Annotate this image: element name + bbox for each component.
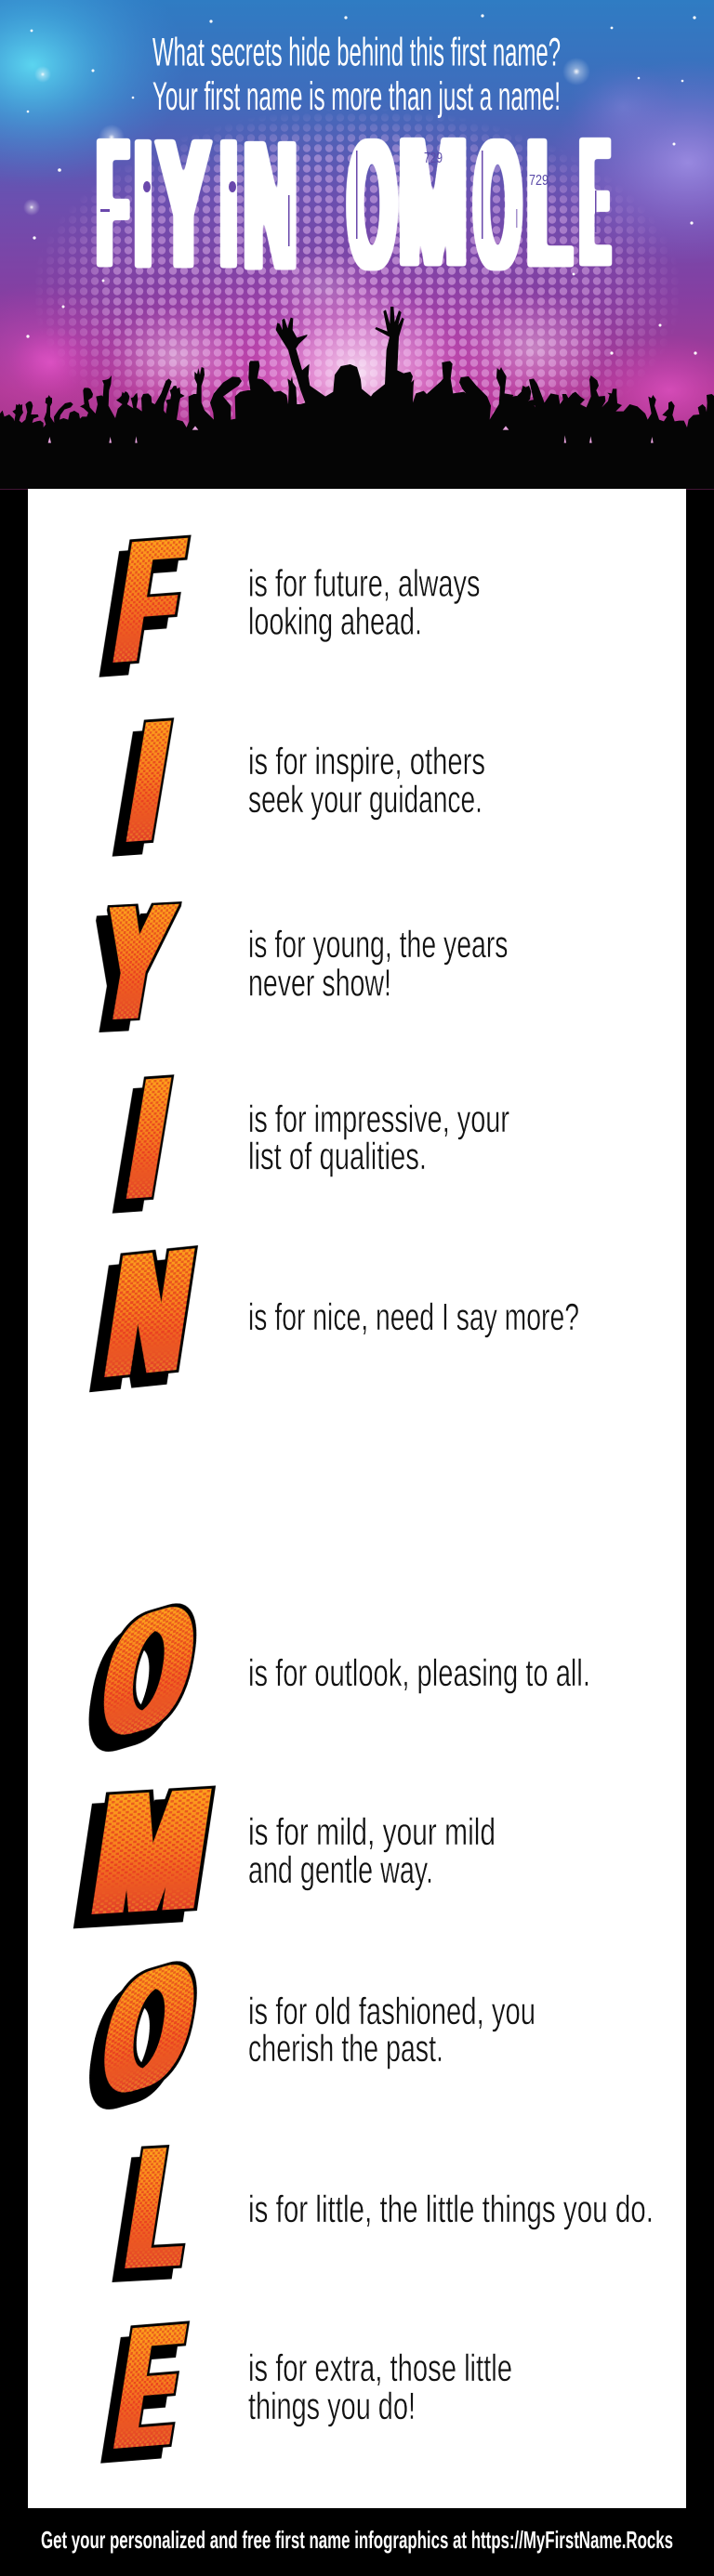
stars and light flares — [23, 14, 697, 355]
crowd silhouette — [0, 307, 714, 490]
row: M: M — [86, 1751, 218, 1952]
row: O — [93, 1563, 590, 1778]
title: name: I — [221, 100, 236, 309]
row: I: I — [120, 1041, 178, 1237]
row: E: is for extra, those little — [248, 2346, 512, 2389]
row: O: cherish the past. — [248, 2027, 443, 2070]
row: F — [107, 500, 481, 700]
title: name: N — [244, 103, 297, 309]
row: N — [99, 1212, 579, 1415]
title: name: 729 — [529, 173, 549, 189]
row: F: is for future, always — [248, 561, 480, 604]
title: name: O — [474, 102, 521, 309]
title: name — [98, 98, 609, 309]
row: N: N — [99, 1212, 201, 1415]
row: O: is for old fashioned, you — [248, 1990, 536, 2032]
row: I — [120, 684, 485, 880]
row: L: L — [119, 2108, 202, 2306]
row: M: and gentle way. — [248, 1848, 433, 1891]
row: M: is for mild, your mild — [248, 1810, 496, 1853]
title: name: 729 — [424, 151, 443, 166]
title: name: M — [399, 98, 467, 306]
title: name: E — [581, 98, 609, 306]
intro lines — [152, 30, 561, 119]
row: I: I — [120, 684, 178, 880]
row: F: F — [107, 500, 192, 700]
row: E: E — [107, 2285, 193, 2487]
row: E: things you do! — [248, 2385, 416, 2427]
row: E — [107, 2285, 512, 2487]
title: name: L — [527, 100, 572, 307]
row: Y — [89, 868, 508, 1056]
panel: acrostic — [28, 489, 686, 2508]
row: L — [119, 2108, 654, 2306]
row: O: O — [93, 1563, 205, 1778]
row: I: is for impressive, your — [248, 1097, 509, 1140]
row: I — [120, 1041, 509, 1237]
row: I: seek your guidance. — [248, 778, 483, 821]
row: N: is for nice, need I say more? — [248, 1295, 579, 1338]
title: name: O — [348, 100, 396, 309]
row: Y: never show! — [248, 961, 391, 1004]
row: O: O — [93, 1921, 205, 2136]
row: O — [93, 1921, 536, 2136]
header: concert stage background — [0, 0, 714, 493]
row: Y: is for young, the years — [248, 923, 508, 966]
title: name: F — [98, 99, 127, 306]
row: Y: Y — [89, 868, 181, 1056]
row: M — [86, 1751, 496, 1952]
row: I: list of qualities. — [248, 1135, 427, 1177]
title: name: Y — [157, 99, 210, 308]
title: name: I — [136, 100, 151, 309]
row: I: is for inspire, others — [248, 740, 485, 782]
row: F: looking ahead. — [248, 600, 422, 643]
